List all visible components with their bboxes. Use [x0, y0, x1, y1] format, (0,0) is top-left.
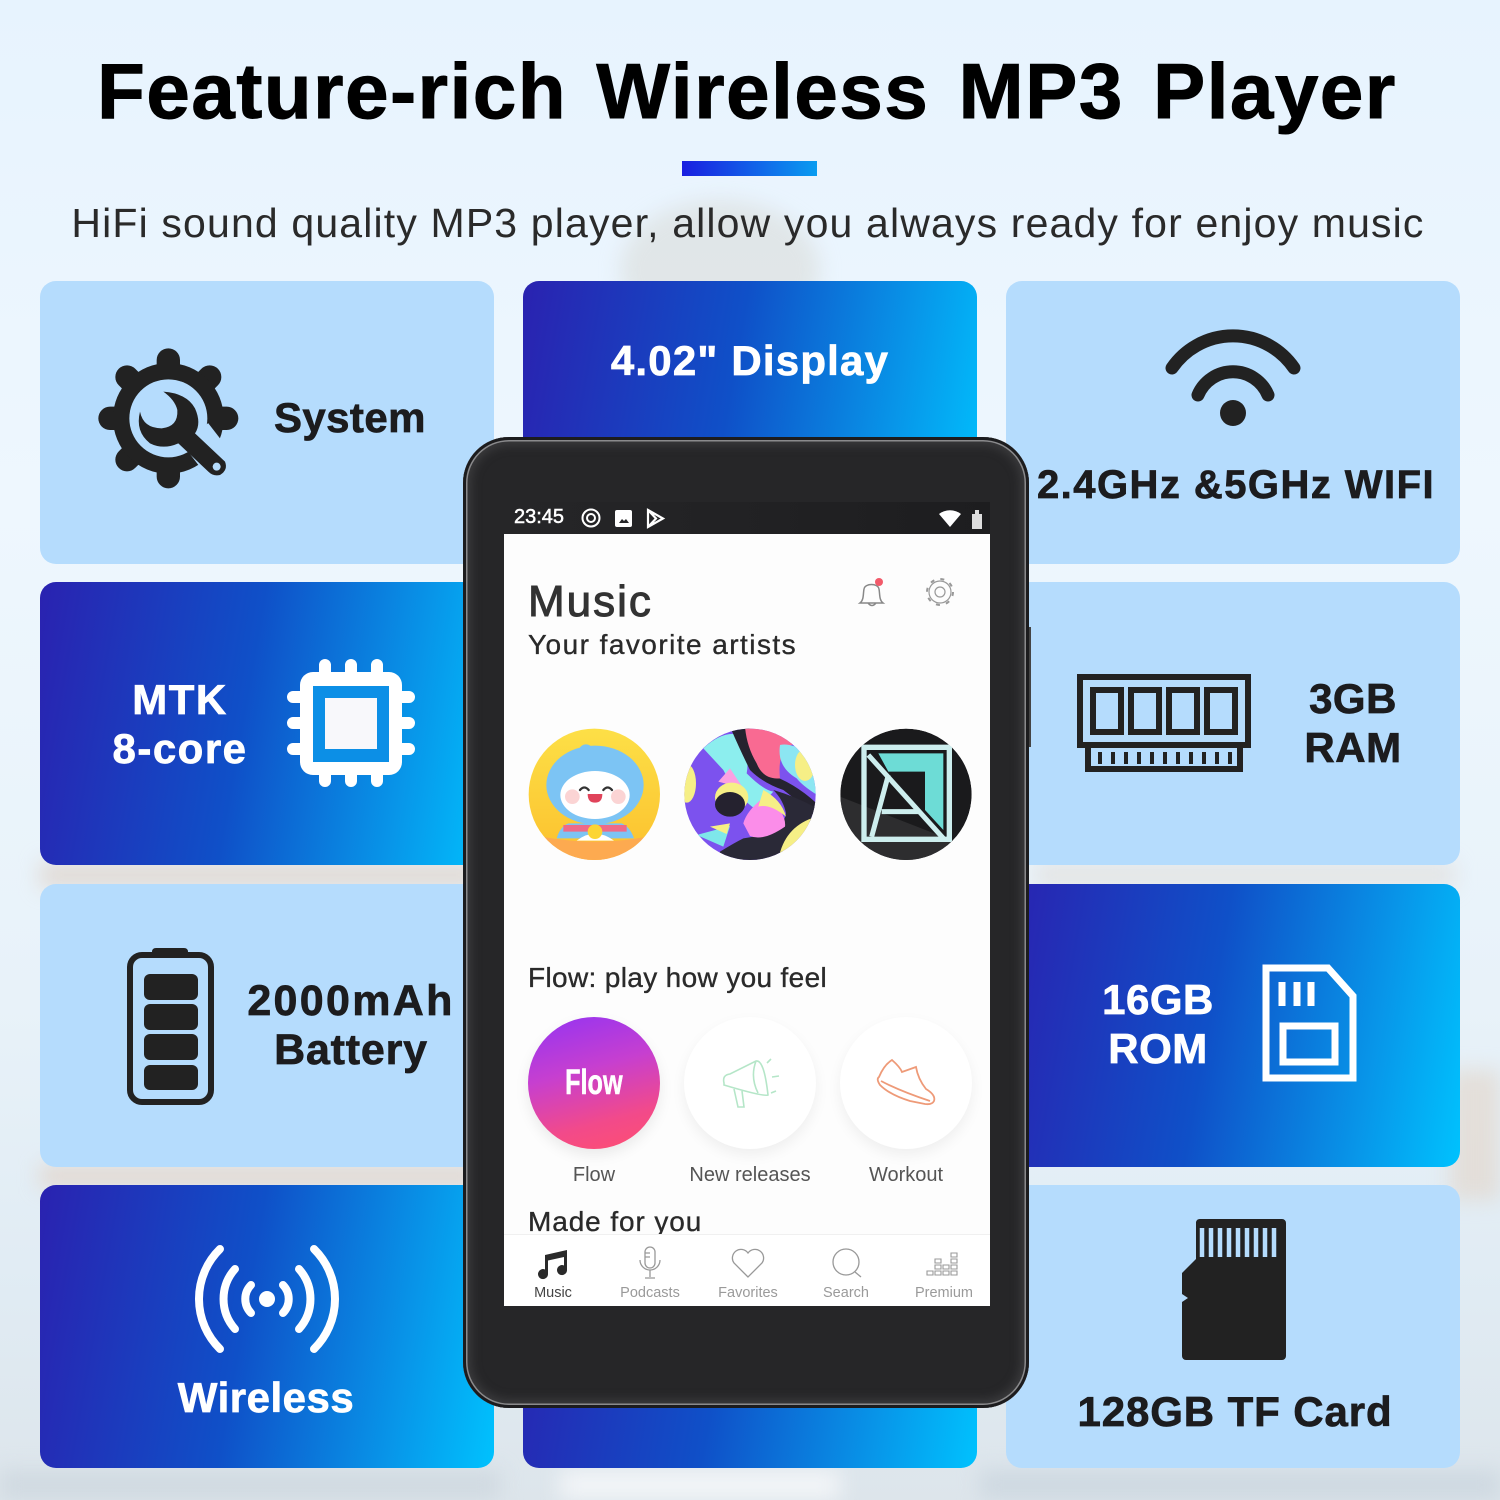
- screen: Workout: [869, 1164, 943, 1186]
- bottom navigation: Search: [823, 1285, 869, 1301]
- nav labels: Music: [534, 1285, 572, 1301]
- label: battery capacity: [247, 977, 455, 1074]
- subtitle: HiFi sound quality MP3 player, allow you always ready for enjoy music: [71, 200, 1425, 246]
- panel: display: [523, 281, 977, 564]
- nav icons: [538, 1246, 958, 1280]
- panel: rom: [1006, 884, 1460, 1167]
- icon: SD card: [1262, 964, 1356, 1082]
- tile: Flow: Flow: [565, 1063, 623, 1102]
- title accent bar: [682, 161, 817, 176]
- icon: ram module: [1077, 674, 1251, 772]
- heading: Music: Music: [528, 577, 653, 626]
- artist: abstract: [684, 728, 816, 860]
- tile: New releases: [684, 1017, 816, 1149]
- tile: Workout: [840, 1017, 972, 1149]
- label: 3GB RAM: 3GB: [1309, 675, 1397, 722]
- icon: micro SD card: [1182, 1219, 1286, 1360]
- label: MTK 8-core: MTK: [132, 676, 228, 723]
- bottom navigation: Premium: [915, 1285, 973, 1301]
- label: System: System: [274, 394, 426, 441]
- bottom navigation: Favorites: [718, 1285, 778, 1301]
- panel: cpu: [40, 582, 494, 865]
- icon: gear and wrench: [98, 348, 238, 488]
- section: Flow: Flow: play how you feel: [528, 962, 827, 993]
- label: TF card: 128GB TF Card: [1077, 1388, 1393, 1435]
- screen: [504, 534, 990, 1306]
- label: 3GB RAM: RAM: [1304, 724, 1402, 771]
- screen: New releases: [689, 1164, 811, 1186]
- label: 3GB RAM: [1304, 675, 1402, 771]
- label: 16GB ROM: [1102, 976, 1214, 1072]
- artist: logo: [840, 729, 977, 863]
- icon: chip: [287, 659, 415, 787]
- side buttons: [1029, 627, 1031, 747]
- status bar: [504, 502, 990, 534]
- tile labels: Flow: [573, 1164, 615, 1186]
- title: Feature-rich Wireless MP3 Player: [97, 47, 1397, 135]
- label: 16GB ROM: 16GB: [1102, 976, 1214, 1023]
- bottom navigation: [504, 1234, 990, 1307]
- label: MTK 8-core: [112, 676, 248, 772]
- label: display size: 4.02" Display: [611, 337, 889, 384]
- panel: tf card: [1006, 1185, 1460, 1468]
- panel: wifi: [1006, 281, 1460, 564]
- label: 16GB ROM: ROM: [1108, 1025, 1208, 1072]
- label: battery capacity: Battery: [274, 1026, 428, 1074]
- label: MTK 8-core: 8-core: [112, 725, 248, 772]
- panel: system: [40, 281, 494, 564]
- icon: wifi: [1166, 329, 1300, 426]
- label: wifi: 2.4GHz &5GHz WIFI: [1037, 463, 1435, 507]
- icon: wireless waves: [195, 1245, 339, 1353]
- bottom navigation: Podcasts: [620, 1285, 680, 1301]
- subheading: favorite artists: Your favorite artists: [528, 629, 797, 660]
- panel: bottom center: [523, 1185, 977, 1468]
- icon: battery: [127, 948, 214, 1105]
- label: battery capacity: 2000mAh: [247, 977, 455, 1025]
- time and status icons: 23:45: [514, 506, 564, 528]
- panel: battery: [40, 884, 494, 1167]
- artist: character: [527, 727, 663, 863]
- phone: [463, 437, 1029, 1408]
- section: Made for you: Made for you: [528, 1206, 702, 1237]
- panel: ram: [1006, 582, 1460, 865]
- artist circles: [528, 728, 972, 860]
- panel: wireless: [40, 1185, 494, 1468]
- label: Wireless: Wireless: [178, 1374, 354, 1421]
- icons: bell and settings: [858, 578, 954, 606]
- tile: Flow: [528, 1017, 660, 1149]
